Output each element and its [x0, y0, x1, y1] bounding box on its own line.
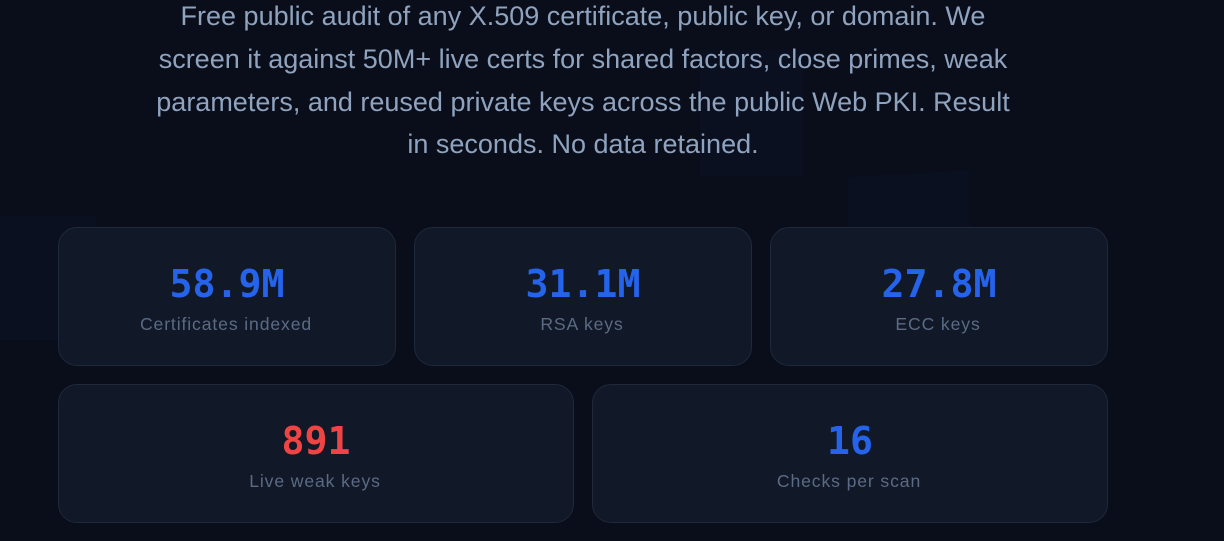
stat card: checks per scan: 16 — [827, 420, 873, 464]
stat card: checks per scan — [592, 384, 1108, 523]
stat card: live weak keys — [58, 384, 574, 523]
stat card: ECC keys: ECC keys — [895, 314, 981, 334]
stat card: live weak keys: Live weak keys — [249, 471, 381, 491]
stat card: certificates indexed: Certificates indexed — [140, 314, 312, 334]
background panel: lower center — [807, 170, 970, 228]
intro text: screen it against 50M+ live certs for shared factors, close primes, weak — [159, 44, 1007, 74]
stat card: certificates indexed — [58, 227, 396, 366]
background panel: center — [700, 50, 803, 176]
stat card: live weak keys: 891 — [282, 420, 350, 464]
intro text: in seconds. No data retained. — [407, 129, 759, 159]
stat card: ECC keys: 27.8M — [882, 263, 996, 307]
stat card: RSA keys — [414, 227, 752, 366]
stat card: RSA keys: RSA keys — [540, 314, 624, 334]
background panel: left — [0, 216, 96, 340]
stat card: certificates indexed: 58.9M — [170, 263, 284, 307]
intro text: Free public audit of any X.509 certificate, public key, or domain. We — [181, 1, 985, 31]
stat card: ECC keys — [770, 227, 1108, 366]
intro text: parameters, and reused private keys across the public Web PKI. Result — [156, 87, 1010, 117]
stat card: checks per scan: Checks per scan — [777, 471, 921, 491]
stat card: RSA keys: 31.1M — [526, 263, 640, 307]
intro text — [156, 1, 1010, 159]
